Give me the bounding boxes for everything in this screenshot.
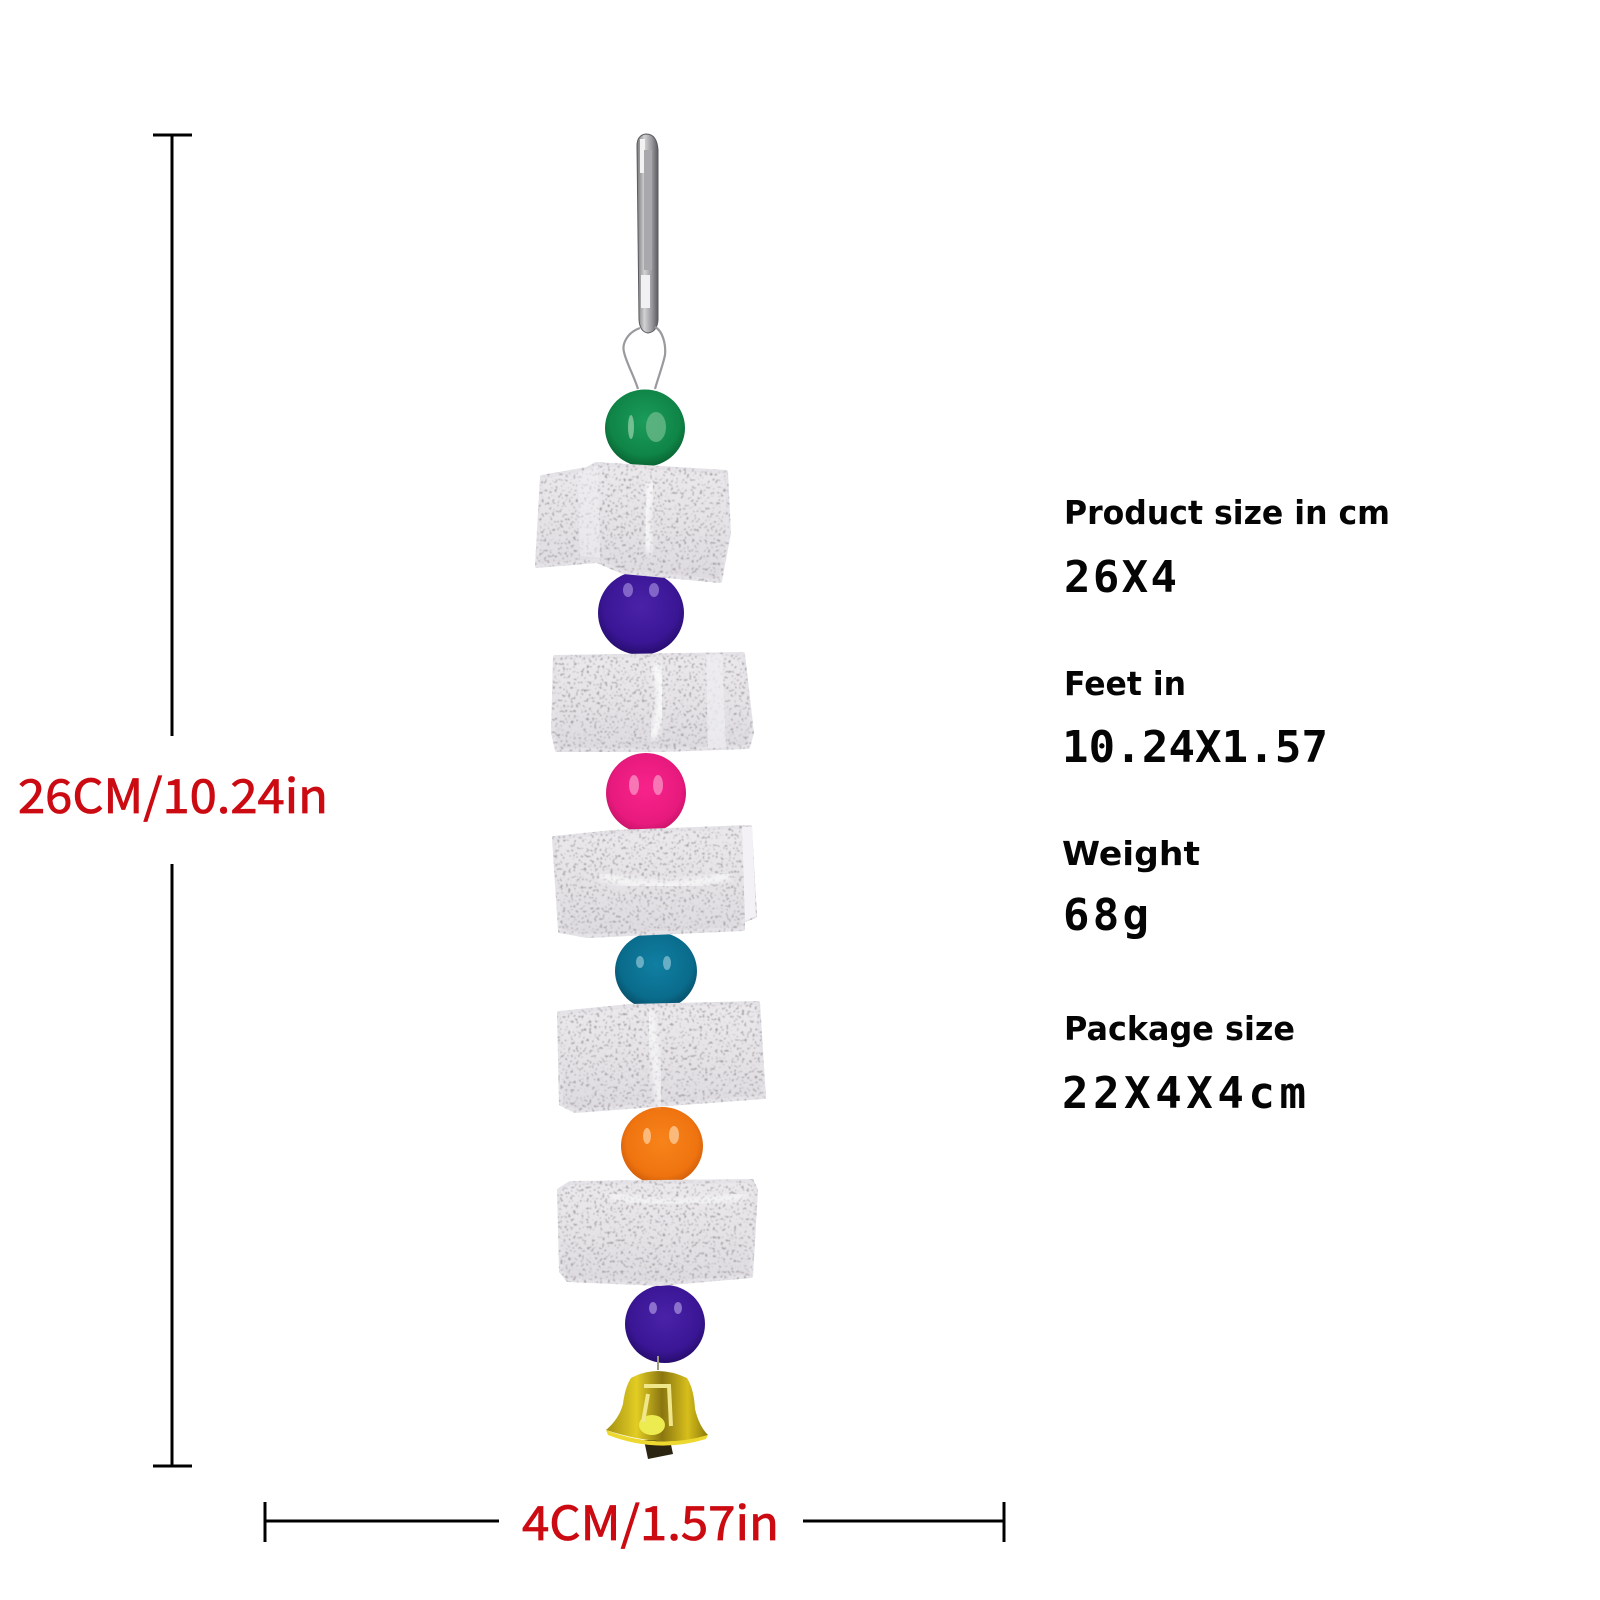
wire loop: [624, 327, 665, 389]
height label: 26CM/10.24in: [18, 758, 328, 827]
spec: product size in cm: 26X4: [1064, 552, 1177, 603]
spec: product size in cm: [1064, 493, 1390, 603]
spec: feet in: 10.24X1.57: [1062, 722, 1328, 773]
pumice stone 1: [537, 464, 729, 581]
spec: feet in: Feet in: [1064, 664, 1186, 703]
spec: package size: Package size: [1064, 1009, 1295, 1048]
width dimension line: [265, 1502, 1004, 1542]
bead: purple upper: [598, 571, 684, 655]
bead: orange: [621, 1107, 703, 1185]
pumice stone 4: [559, 1003, 764, 1111]
pumice stone 2: [553, 654, 752, 750]
width label: 4CM/1.57in: [522, 1485, 779, 1554]
gold bell: [606, 1356, 708, 1459]
spec: package size: [1062, 1009, 1306, 1119]
product: hanging pumice bird toy: [537, 134, 764, 1459]
bead: teal: [615, 932, 697, 1010]
metal hook: [637, 134, 658, 333]
spec: product size in cm: Product size in cm: [1064, 493, 1390, 532]
pumice stone 5: [559, 1181, 756, 1284]
pumice stone 3: [554, 827, 756, 936]
height dimension line: [153, 135, 192, 1466]
spec: weight: 68g: [1063, 890, 1149, 941]
bead: pink: [606, 753, 686, 833]
spec: feet in: [1062, 664, 1328, 773]
spec: package size: 22X4X4cm: [1062, 1068, 1306, 1119]
spec: weight: Weight: [1062, 834, 1200, 873]
spec: weight: [1062, 834, 1200, 941]
bead: purple lower: [625, 1285, 705, 1363]
bead: green: [605, 390, 685, 466]
